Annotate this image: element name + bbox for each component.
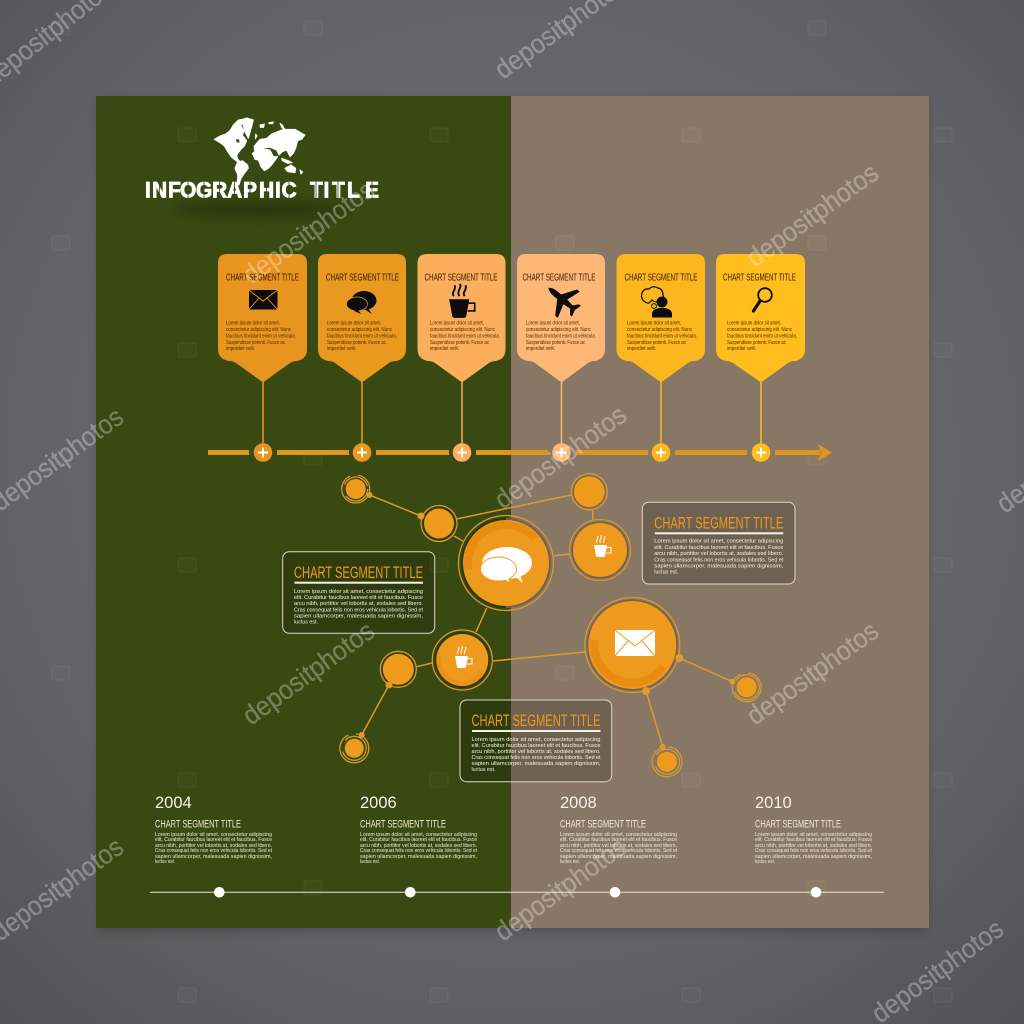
card 4: plane: faucibus tincidunt enim ut vehicula. [526,334,596,340]
card 3: coffee: CHART SEGMENT TITLE [424,272,498,284]
card 4: plane: Lorem ipsum dolor sit amet, [526,320,580,326]
year block 2004: Cras consequat felis non eros vehicula lobortis. Sed et [155,848,273,854]
watermarks: depositphotos [741,615,884,731]
callout: right: sapien ullamcorper, malesuada sapien dignissim, [654,564,784,570]
callout: bottom: sapien ullamcorper, malesuada sapien dignissim, [472,761,601,767]
bottom timeline [150,887,884,898]
watermarks: depositphotos [489,399,632,515]
card 4: plane: Suspendisse potenti. Fusce ac [526,340,585,346]
card 6: magnifier: Lorem ipsum dolor sit amet, [727,320,781,326]
panel shadow [98,100,927,932]
node: coffee lower left [432,630,492,690]
year block 2006: luctus est. [360,859,380,865]
year block 2004: sapien ullamcorper, malesuada sapien dignissim, [155,854,272,860]
network connectors [362,495,732,747]
watermarks: depositphotos [489,831,632,947]
callout: left: sapien ullamcorper, malesuada sapien dignissim, [294,613,423,619]
card 3: coffee: imperdiet velit. [430,346,459,352]
node: coffee right [570,520,630,580]
year block 2004: 2004 [155,794,192,812]
callout: bottom: luctus est. [472,767,496,773]
watermarks: depositphotos [237,615,380,731]
year block 2006: Lorem ipsum dolor sit amet, consectetur adipiscing [360,832,477,838]
card 1: mail: Suspendisse potenti. Fusce ac [226,340,285,346]
card 5: person with thought cloud: Lorem ipsum dolor sit amet, [627,320,681,326]
year block 2008: arcu nibh, porttitor vel lobortis at, sodales sed libero. [560,843,677,849]
card 5: person with thought cloud: imperdiet velit. [627,346,656,352]
card 5: person with thought cloud: faucibus tincidunt enim ut vehicula. [627,334,697,340]
year block 2010: luctus est. [755,859,775,865]
card 1: mail: consectetur adipiscing elit. Nunc [226,327,291,333]
year block 2008: Lorem ipsum dolor sit amet, consectetur adipiscing [560,832,677,838]
node: small bottom [652,744,682,777]
card 4: plane: imperdiet velit. [526,346,555,352]
year block 2010: elit. Curabitur faucibus laoreet elit et faucibus. Fusce [755,837,872,843]
year block 2008 [560,794,678,865]
panel: green left [96,96,511,928]
card 6: magnifier: faucibus tincidunt enim ut vehicula. [727,334,797,340]
callout: right [642,502,795,584]
year block 2004: CHART SEGMENT TITLE [155,818,241,830]
card 5: person with thought cloud: Suspendisse potenti. Fusce ac [627,340,686,346]
callout: right: CHART SEGMENT TITLE [654,514,783,532]
card 1: mail: faucibus tincidunt enim ut vehicula. [226,334,296,340]
watermarks: depositphotos [237,174,380,290]
year block 2010: Lorem ipsum dolor sit amet, consectetur adipiscing [755,832,872,838]
card 3: coffee: faucibus tincidunt enim ut vehicula. [430,334,500,340]
card 2: chat: consectetur adipiscing elit. Nunc [327,327,392,333]
card 4: plane [517,254,605,462]
callout: left: Cras consequat felis non eros vehicula lobortis. Sed et [294,607,423,613]
panel: taupe right [511,96,929,928]
year block 2008: 2008 [560,794,597,812]
card 5: person with thought cloud [616,254,705,462]
year block 2010 [755,794,873,865]
callout: bottom: elit. Curabitur faucibus laoreet elit et faucibus. Fusce [472,743,600,749]
title shadow [172,204,352,216]
card 3: coffee: consectetur adipiscing elit. Nunc [430,327,495,333]
year block 2006: CHART SEGMENT TITLE [360,818,446,830]
node: top right medium [571,474,607,510]
year block 2008: Cras consequat felis non eros vehicula lobortis. Sed et [560,848,678,854]
year block 2008: elit. Curabitur faucibus laoreet elit et faucibus. Fusce [560,837,677,843]
callout: right: Lorem ipsum dolor sit amet, consectetur adipiscing [654,539,783,545]
year block 2004 [155,794,273,865]
callout: left: arcu nibh, porttitor vel lobortis at, sodales sed libero. [294,601,423,607]
card 3: coffee: Suspendisse potenti. Fusce ac [430,340,489,346]
node: small right [729,673,761,702]
year block 2008: CHART SEGMENT TITLE [560,818,646,830]
year block 2004: elit. Curabitur faucibus laoreet elit et faucibus. Fusce [155,837,272,843]
card 1: mail [218,254,307,462]
card 2: chat: CHART SEGMENT TITLE [326,272,399,284]
card 4: plane: CHART SEGMENT TITLE [522,272,596,284]
year block 2010: 2010 [755,794,792,812]
year block 2008: luctus est. [560,859,580,865]
node: left medium [380,651,416,688]
node: large chat [458,516,554,610]
card 6: magnifier: Suspendisse potenti. Fusce ac [727,340,786,346]
card 6: magnifier: consectetur adipiscing elit. Nunc [727,327,792,333]
card 2: chat [318,254,406,462]
year block 2004: luctus est. [155,859,175,865]
card 6: magnifier: imperdiet velit. [727,346,756,352]
main timeline with arrow [208,444,832,461]
node: large mail [585,598,683,695]
year block 2010: arcu nibh, porttitor vel lobortis at, sodales sed libero. [755,843,872,849]
card 3: coffee [418,254,506,462]
card 1: mail: imperdiet velit. [226,346,255,352]
year block 2004: arcu nibh, porttitor vel lobortis at, sodales sed libero. [155,843,272,849]
year block 2006: arcu nibh, porttitor vel lobortis at, sodales sed libero. [360,843,477,849]
year block 2006: elit. Curabitur faucibus laoreet elit et faucibus. Fusce [360,837,477,843]
callout: left: luctus est. [294,619,318,625]
callout: right: Cras consequat felis non eros vehicula lobortis. Sed et [654,558,784,564]
callout: right: luctus est. [654,570,679,576]
callout: bottom: Cras consequat felis non eros vehicula lobortis. Sed et [472,755,601,761]
year block 2006: Cras consequat felis non eros vehicula lobortis. Sed et [360,848,478,854]
callout: bottom: CHART SEGMENT TITLE [472,711,600,730]
card 2: chat: imperdiet velit. [327,346,356,352]
node: small top left [342,475,372,503]
card 3: coffee: Lorem ipsum dolor sit amet, [430,320,484,326]
callout: right: arcu nibh, porttitor vel lobortis at, sodales sed libero. [654,551,784,557]
year block 2010: CHART SEGMENT TITLE [755,818,841,830]
callout: left: Lorem ipsum dolor sit amet, consectetur adipiscing [294,589,423,595]
callout: bottom [460,700,612,782]
card 2: chat: Suspendisse potenti. Fusce ac [327,340,386,346]
year block 2010: Cras consequat felis non eros vehicula lobortis. Sed et [755,848,873,854]
card 4: plane: consectetur adipiscing elit. Nunc [526,327,591,333]
callout: left: CHART SEGMENT TITLE [294,563,423,582]
year block 2008: sapien ullamcorper, malesuada sapien dignissim, [560,854,677,860]
watermarks: depositphotos [741,157,884,273]
callout: left [283,552,435,633]
card 2: chat: faucibus tincidunt enim ut vehicula. [327,334,397,340]
callout: left: elit. Curabitur faucibus laoreet elit et faucibus. Fusce [294,595,423,601]
year block 2006: 2006 [360,794,397,812]
title: INFOGRAPHIC TITLE [145,177,379,203]
node: upper left medium [418,506,457,542]
card 2: chat: Lorem ipsum dolor sit amet, [327,320,381,326]
callout: bottom: arcu nibh, porttitor vel lobortis at, sodales sed libero. [472,749,601,755]
card 6: magnifier [716,254,805,462]
year block 2004: Lorem ipsum dolor sit amet, consectetur adipiscing [155,832,272,838]
year block 2006 [360,794,478,865]
card 1: mail: Lorem ipsum dolor sit amet, [226,320,280,326]
world map icon [214,118,305,185]
callout: right: elit. Curabitur faucibus laoreet elit et faucibus. Fusce [654,545,783,551]
year block 2006: sapien ullamcorper, malesuada sapien dignissim, [360,854,477,860]
card 5: person with thought cloud: consectetur adipiscing elit. Nunc [627,327,692,333]
card 6: magnifier: CHART SEGMENT TITLE [723,272,796,284]
card 5: person with thought cloud: CHART SEGMENT TITLE [624,272,698,284]
card 1: mail: CHART SEGMENT TITLE [226,272,299,284]
node: small bottom left [340,732,369,763]
callout: bottom: Lorem ipsum dolor sit amet, consectetur adipiscing [472,737,600,743]
year block 2010: sapien ullamcorper, malesuada sapien dignissim, [755,854,872,860]
